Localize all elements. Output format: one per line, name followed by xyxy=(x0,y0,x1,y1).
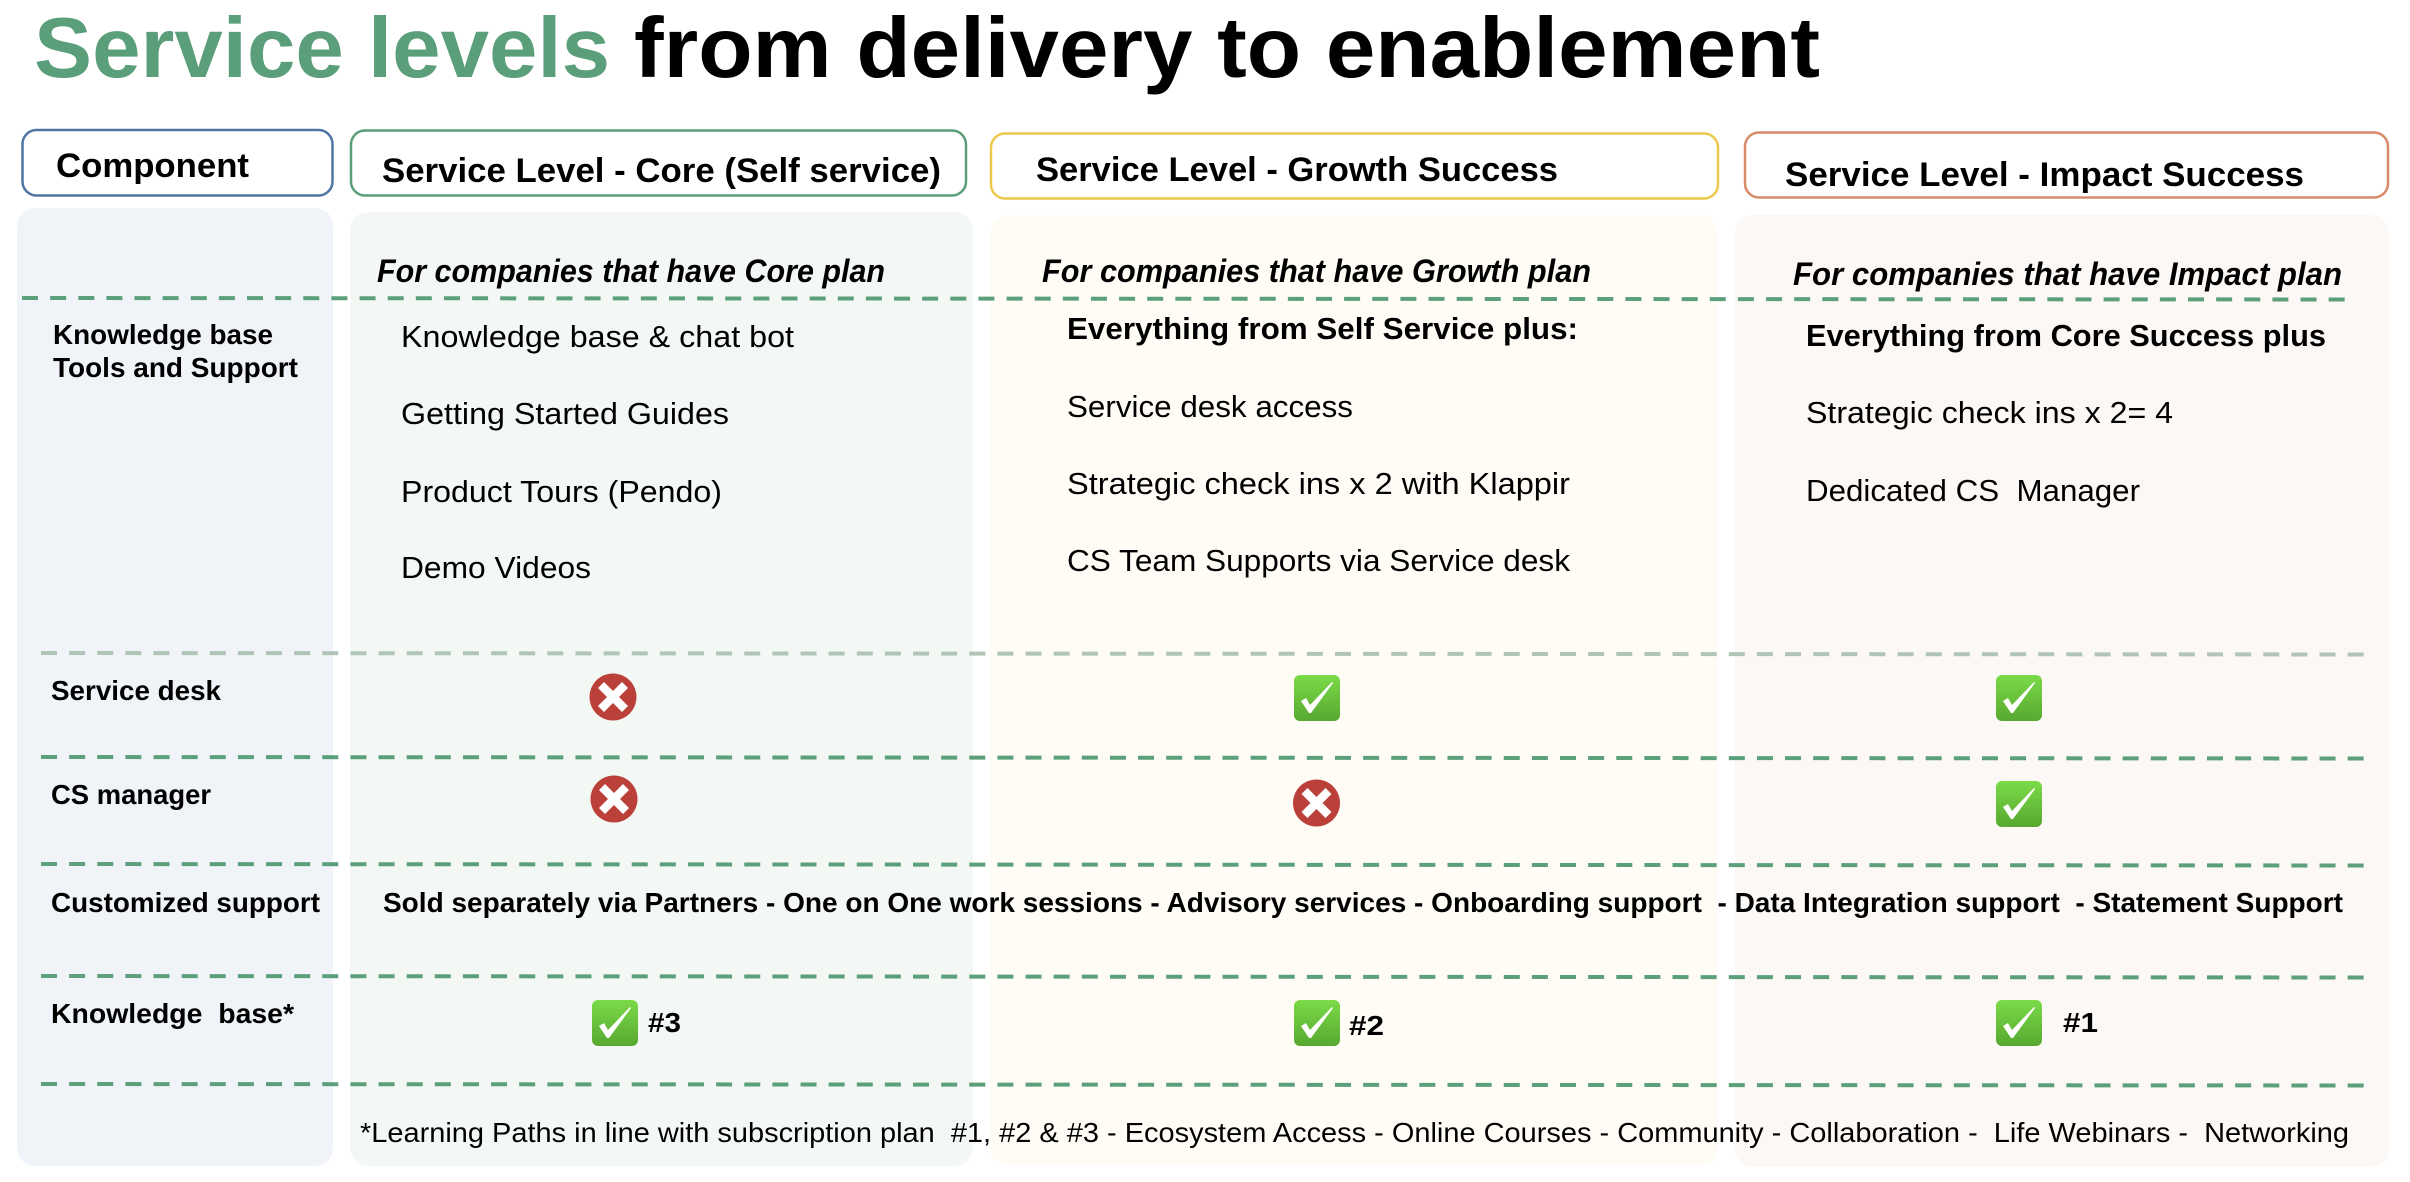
core feature list xyxy=(401,319,794,585)
growth feature list: Everything from Self Service plus: xyxy=(1067,311,1578,346)
icon and tier: growth #2 xyxy=(1294,1000,1384,1046)
growth feature list: Strategic check ins x 2 with Klappir xyxy=(1067,466,1570,501)
row label: knowledge base tools and support xyxy=(53,319,298,383)
audience: impact plan: For companies that have Impact plan xyxy=(1793,256,2342,292)
icon: core cs manager cross xyxy=(590,776,638,822)
panel: component column xyxy=(17,208,333,1166)
customized support description: Sold separately via Partners - One on One work sessions - Advisory services - Onboarding support - Data Integration support - Statement Support xyxy=(383,887,2343,918)
row label: customized support: Customized support xyxy=(51,887,320,918)
footnote: *Learning Paths in line with subscription plan #1, #2 & #3 - Ecosystem Access - Online Courses - Community - Collaboration - Life Webinars - Networking xyxy=(360,1117,2349,1148)
icon: growth cs manager cross xyxy=(1293,780,1340,826)
core feature list: Knowledge base & chat bot xyxy=(401,319,794,354)
heading: impact service level xyxy=(1745,132,2388,198)
icon and tier: core #3 xyxy=(592,1000,681,1046)
impact feature list: Everything from Core Success plus xyxy=(1806,318,2326,353)
growth feature list: CS Team Supports via Service desk xyxy=(1067,543,1570,578)
row label: cs manager: CS manager xyxy=(51,779,211,810)
row label: knowledge base tools and support: Tools and Support xyxy=(53,352,298,383)
heading: impact service level: Service Level - Impact Success xyxy=(1785,156,2304,194)
growth feature list xyxy=(1067,311,1578,578)
icon: growth service desk check xyxy=(1294,675,1340,721)
row label: knowledge base tools and support: Knowledge base xyxy=(53,319,273,350)
icon and tier: core #3: #3 xyxy=(648,1007,681,1038)
title: from delivery to enablement xyxy=(634,1,1820,96)
icon and tier: growth #2: #2 xyxy=(1349,1010,1384,1041)
growth feature list: Service desk access xyxy=(1067,389,1353,424)
impact feature list: Dedicated CS Manager xyxy=(1806,473,2140,508)
icon: core service desk cross xyxy=(590,674,636,720)
title xyxy=(34,1,1820,96)
core feature list: Product Tours (Pendo) xyxy=(401,474,722,509)
impact feature list: Strategic check ins x 2= 4 xyxy=(1806,395,2173,430)
audience: core plan: For companies that have Core plan xyxy=(377,253,885,289)
title: Service levels xyxy=(34,1,610,96)
core feature list: Getting Started Guides xyxy=(401,396,729,431)
core feature list: Demo Videos xyxy=(401,550,591,585)
icon and tier: impact #1: #1 xyxy=(2063,1007,2098,1038)
heading: growth service level: Service Level - Growth Success xyxy=(1036,151,1558,189)
row label: knowledge base: Knowledge base* xyxy=(51,998,294,1029)
heading: core service level xyxy=(351,130,966,196)
icon and tier: impact #1 xyxy=(1996,1000,2098,1046)
icon: impact cs manager check xyxy=(1996,781,2042,827)
icon: impact service desk check xyxy=(1996,675,2042,721)
heading: core service level: Service Level - Core (Self service) xyxy=(382,152,941,190)
audience: growth plan: For companies that have Growth plan xyxy=(1042,253,1591,289)
heading: component: Component xyxy=(56,147,249,185)
impact feature list xyxy=(1806,318,2326,508)
row label: service desk: Service desk xyxy=(51,675,221,706)
panel: impact column xyxy=(1735,215,2389,1167)
heading: growth service level xyxy=(991,134,1718,198)
heading: component xyxy=(22,130,332,196)
panel: growth column xyxy=(990,215,1718,1166)
panel: core column xyxy=(350,212,973,1166)
